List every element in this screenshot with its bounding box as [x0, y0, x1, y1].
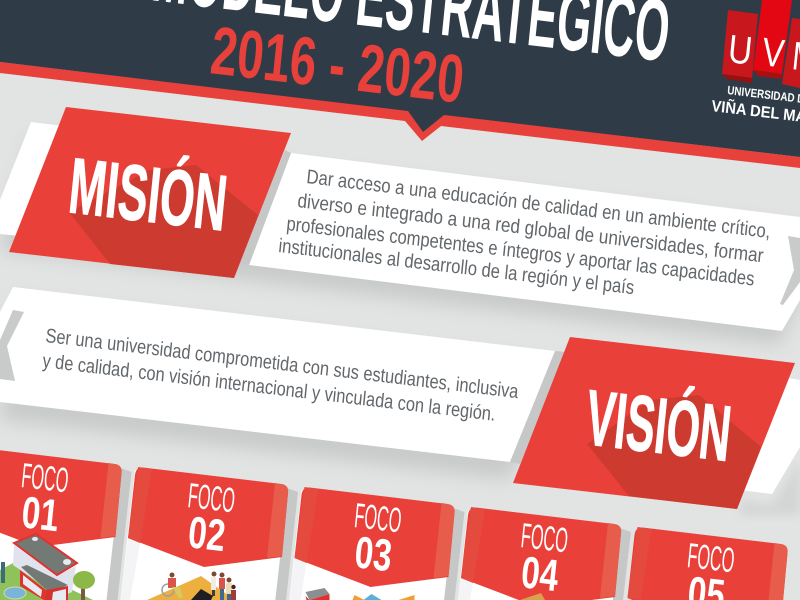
logo right bar [782, 18, 800, 88]
card: foco 04: FOCO [519, 516, 570, 560]
card: foco 03 [289, 487, 464, 600]
misión long shadow [69, 165, 258, 278]
card: foco 02 [120, 467, 298, 600]
header dark panel [0, 0, 800, 157]
logo letter V: V [760, 30, 787, 77]
visión outer shadow [740, 460, 800, 515]
visión paragraph: Ser una universidad comprometida con sus estudiantes, inclusiva [44, 325, 520, 403]
person [1, 562, 5, 583]
book stack [306, 588, 330, 600]
card body [120, 470, 288, 600]
visión white band [0, 287, 555, 462]
blocks [352, 595, 364, 600]
walls [13, 545, 76, 597]
annex red front [20, 570, 46, 600]
annex roof [21, 565, 68, 593]
card right stripe [267, 483, 288, 558]
logo UVM [711, 0, 800, 128]
card number: 03 [352, 526, 394, 581]
illustration: books and blocks [306, 588, 414, 600]
misión white band left [0, 122, 80, 240]
card red head [461, 507, 621, 600]
misión band shadow [0, 135, 800, 345]
visión long shadow [587, 395, 761, 509]
card: foco 02: FOCO [186, 476, 237, 520]
logo letter U: U [726, 27, 754, 74]
card shadow [444, 508, 464, 600]
card: foco 05: FOCO [686, 536, 736, 580]
card red head [628, 527, 788, 600]
card right stripe [100, 463, 122, 538]
annex red box [44, 586, 68, 600]
card: foco 01 [0, 447, 132, 600]
card body [458, 510, 621, 600]
panel: misión [0, 107, 800, 345]
visión band shadow [0, 300, 555, 480]
platform [147, 576, 235, 600]
roof [14, 534, 77, 575]
visión paragraph: y de calidad, con visión internacional y vinculada con la región. [41, 350, 497, 426]
card red head [294, 487, 455, 587]
misión paragraph: institucionales al desarrollo de la región y el país [277, 235, 635, 299]
misión red box [9, 107, 291, 278]
logo left bar [722, 10, 758, 78]
header red border with notch [0, 62, 800, 168]
card red head [0, 447, 122, 547]
lawn [0, 562, 93, 600]
card shadow [275, 488, 298, 600]
misión paragraph [277, 166, 771, 299]
misión grey fold [240, 150, 291, 265]
visión right white band [740, 378, 800, 494]
standing people [211, 572, 236, 600]
card right stripe [768, 543, 788, 600]
card left stripe [461, 507, 485, 583]
card left stripe [128, 467, 152, 543]
card shadow [106, 468, 132, 600]
card body left stripe [120, 538, 140, 600]
title years: 2016 - 2020 [207, 13, 467, 118]
misión white band right [249, 153, 800, 331]
tree [73, 571, 95, 600]
illustration: desk [520, 593, 545, 600]
card: foco 01: FOCO [20, 456, 70, 500]
card left stripe [294, 487, 318, 563]
misión heading: MISIÓN [65, 141, 231, 248]
roof vents [32, 537, 38, 541]
card right stripe [600, 523, 621, 598]
card body left stripe [289, 558, 306, 600]
pool [4, 587, 26, 599]
card: foco 03: FOCO [353, 496, 403, 540]
visión chevron [0, 310, 24, 381]
logo middle bar [753, 0, 792, 74]
card body left stripe [458, 578, 473, 600]
card: foco 05 [628, 527, 788, 600]
card left stripe [628, 527, 652, 600]
card: foco 04 [458, 507, 631, 600]
header band [0, 0, 800, 168]
card body [0, 450, 122, 600]
wheelchair user [162, 572, 183, 598]
card number: 02 [186, 506, 228, 561]
visión grey fold [510, 351, 565, 464]
card body [289, 490, 454, 600]
illustration: people on platform [147, 572, 236, 600]
card red head [128, 467, 288, 567]
misión chevron [780, 236, 800, 305]
graduation cap [191, 589, 213, 600]
card number: 01 [19, 486, 61, 541]
card right stripe [434, 503, 455, 578]
card shadow [613, 528, 631, 600]
panel: visión [0, 287, 800, 515]
illustration: campus building [0, 534, 95, 600]
visión red box [513, 337, 795, 509]
